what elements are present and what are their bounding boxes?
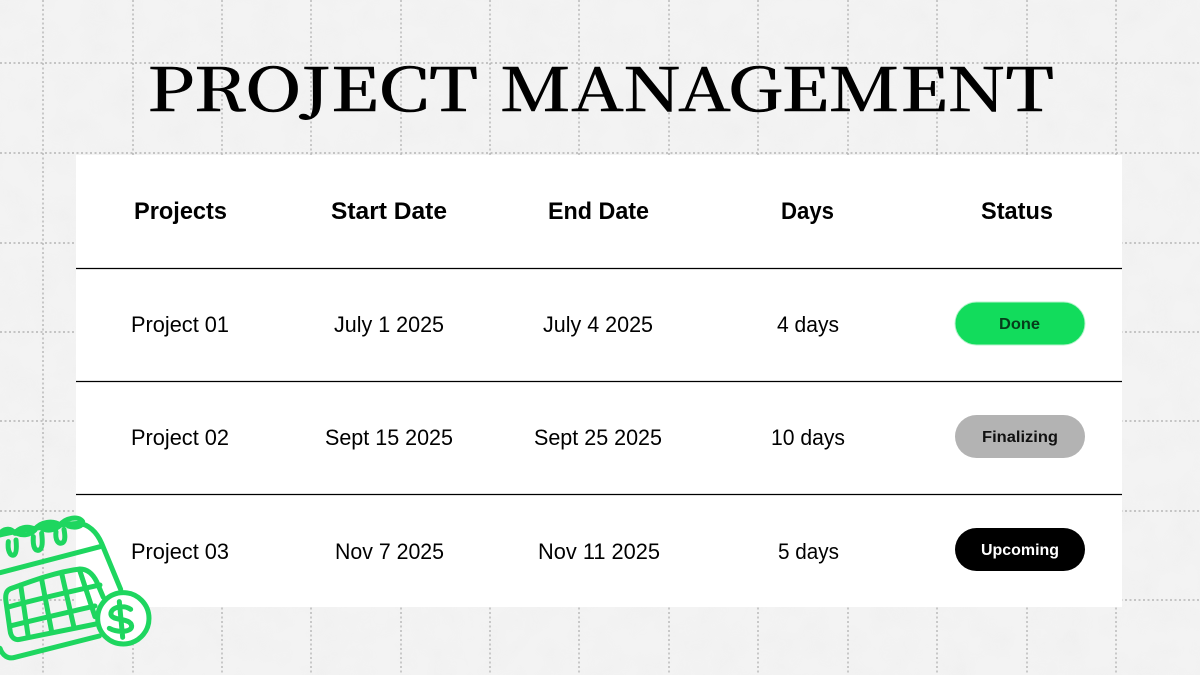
row: project 03: Project 03 (131, 539, 229, 564)
table header row: Days (781, 198, 834, 225)
row: project 02 (131, 415, 1085, 458)
row: project 02: Project 02 (131, 425, 229, 450)
table header row: Status (981, 198, 1053, 225)
icon: calendar with dollar coin (0, 518, 149, 658)
table header row: Projects (134, 198, 227, 225)
row: project 03: Nov 11 2025 (538, 539, 660, 564)
table header row: Start Date (331, 198, 447, 225)
status pill: done: Done (999, 316, 1040, 333)
row: project 01: July 4 2025 (543, 312, 653, 337)
status pill: upcoming (955, 528, 1085, 571)
status pill: upcoming: Upcoming (981, 542, 1059, 559)
row: project 02: 10 days (771, 425, 845, 450)
title: MANAGEMENT (500, 43, 1054, 129)
row: project 01: 4 days (777, 312, 839, 337)
table header row: End Date (548, 198, 649, 225)
row: project 03: Nov 7 2025 (335, 539, 444, 564)
row: project 02: Sept 25 2025 (534, 425, 662, 450)
status pill: done (955, 302, 1085, 345)
title (147, 43, 1054, 129)
row: project 03: 5 days (778, 539, 839, 564)
row: project 01: Project 01 (131, 312, 229, 337)
panel: project table (76, 155, 1122, 607)
table header row (134, 198, 1053, 225)
status pill: finalizing (955, 415, 1085, 458)
row: project 02: Sept 15 2025 (325, 425, 453, 450)
row: project 03 (131, 528, 1085, 571)
row: project 01 (131, 302, 1085, 345)
status pill: finalizing: Finalizing (982, 429, 1058, 446)
row: project 01: July 1 2025 (334, 312, 444, 337)
title: PROJECT (147, 43, 478, 129)
